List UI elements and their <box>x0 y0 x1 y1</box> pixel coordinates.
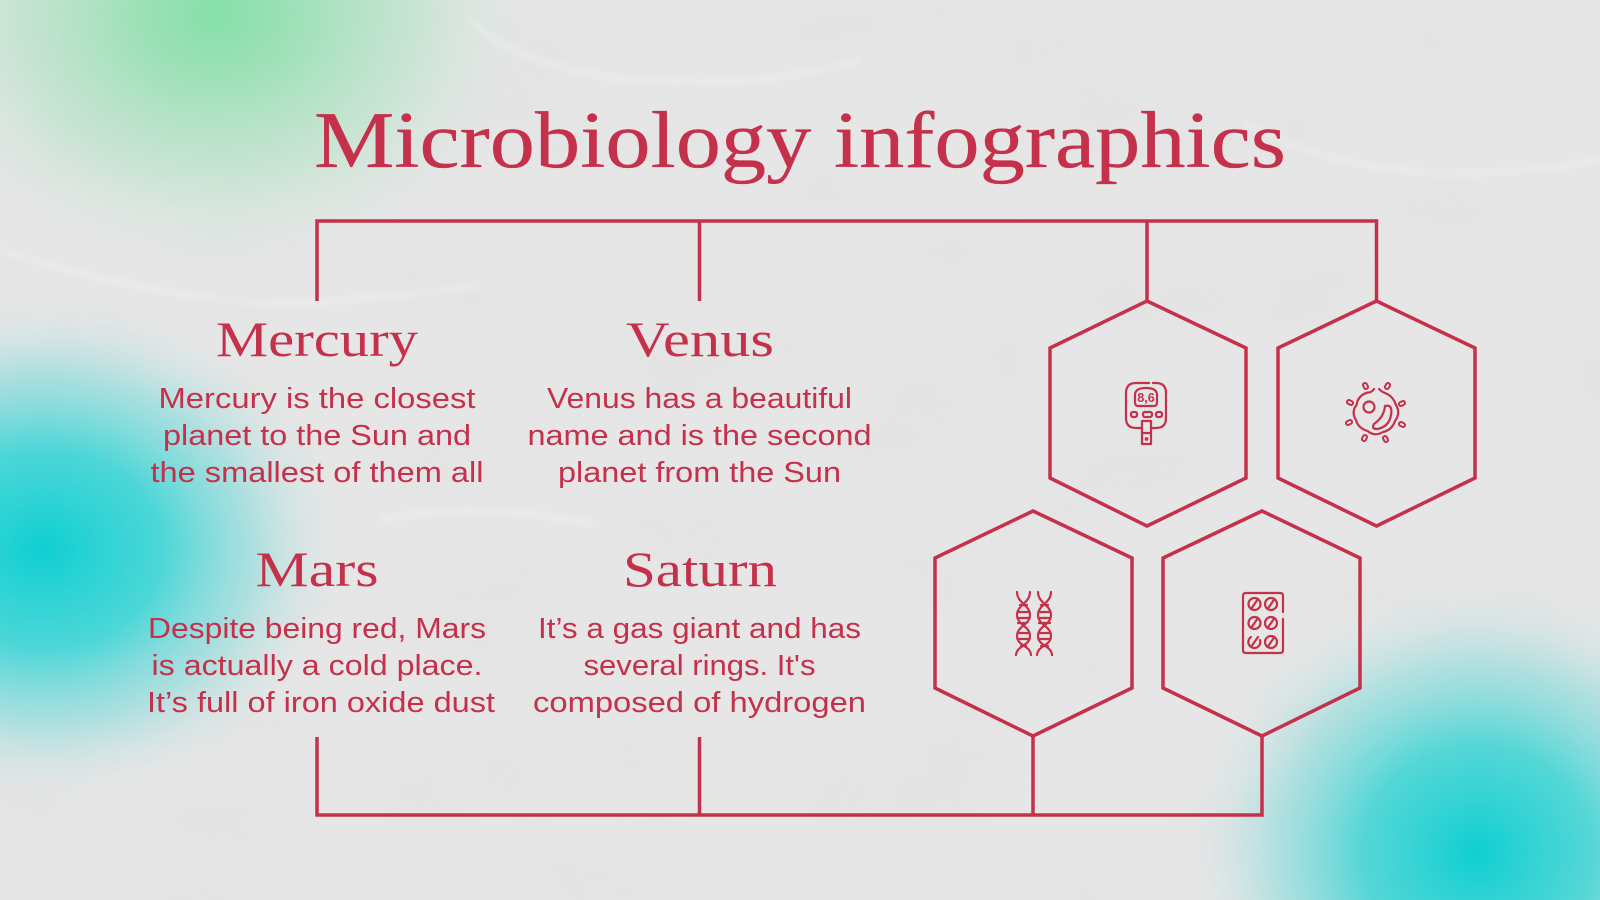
icon: pill blister pack <box>1243 593 1283 653</box>
text: Saturn description: composed of hydrogen <box>533 687 866 719</box>
text: Mercury description: planet to the Sun and <box>163 420 471 452</box>
text: Mercury description <box>150 383 484 489</box>
heading: Mercury: Mercury <box>216 311 418 367</box>
text: Venus description <box>528 383 872 489</box>
text: Mars description: is actually a cold place. <box>152 650 482 682</box>
heading: Saturn: Saturn <box>623 541 777 597</box>
icon: microbe <box>1348 385 1403 440</box>
text: Saturn description: several rings. It's <box>584 650 816 682</box>
text: Saturn description: It’s a gas giant and has <box>538 613 861 645</box>
text: Venus description: planet from the Sun <box>558 457 841 489</box>
icon: glucose meter <box>1126 383 1166 444</box>
top connector lines <box>317 221 1376 301</box>
text: Mars description: It’s full of iron oxide dust <box>147 687 495 719</box>
hexagon: DNA <box>935 511 1132 736</box>
icon: DNA strands <box>1016 592 1052 655</box>
panel: Mercury <box>150 311 484 489</box>
hexagon: glucose meter <box>1050 301 1246 526</box>
title: Microbiology infographics <box>314 95 1286 185</box>
hexagon: pills <box>1163 511 1360 736</box>
text: Venus description: Venus has a beautiful <box>547 383 852 415</box>
panel: Venus <box>528 311 872 489</box>
text: Mercury description: Mercury is the closest <box>158 383 476 415</box>
text: Mars description: Despite being red, Mars <box>148 613 486 645</box>
heading: Mars: Mars <box>256 541 378 597</box>
bottom connector lines <box>317 736 1262 815</box>
text: Venus description: name and is the second <box>528 420 872 452</box>
text: Mars description <box>147 613 495 719</box>
text: Saturn description <box>533 613 866 719</box>
hexagon: microbe <box>1278 301 1475 526</box>
panel: Saturn <box>533 541 866 719</box>
text: Mercury description: the smallest of them all <box>150 457 484 489</box>
panel: Mars <box>147 541 495 719</box>
icon label: reading: 8,6 <box>1137 391 1155 405</box>
heading: Venus: Venus <box>626 311 774 367</box>
